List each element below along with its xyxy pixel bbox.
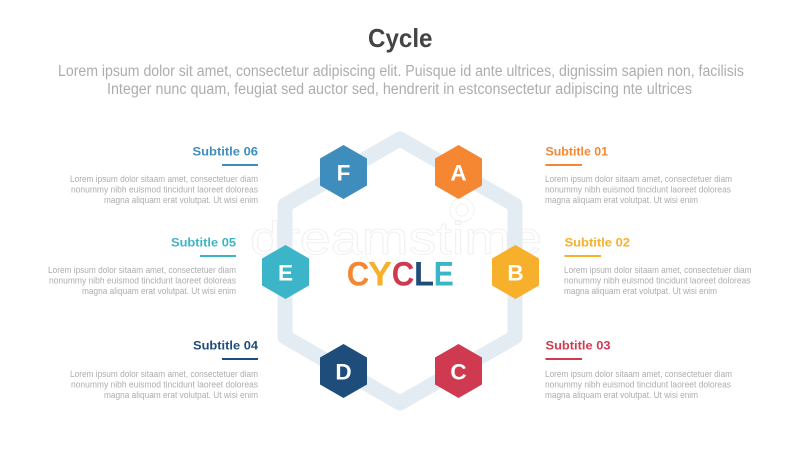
block: subtitle 01: magna aliquam erat volutpat. Ut wisi enim xyxy=(545,195,698,205)
hexagon F xyxy=(320,145,367,199)
hexagon ring xyxy=(285,139,515,403)
block: subtitle 05: Lorem ipsum dolor sitaam amet, consectetuer diam xyxy=(48,265,236,275)
block: subtitle 04: magna aliquam erat volutpat. Ut wisi enim xyxy=(104,390,258,400)
block: subtitle 01 xyxy=(545,144,732,205)
hexagon E: E xyxy=(278,260,293,286)
block: subtitle 03 xyxy=(545,338,732,400)
block: subtitle 01: Lorem ipsum dolor sitaam amet, consectetuer diam xyxy=(545,174,732,184)
center word CYCLE: Y xyxy=(368,256,392,294)
block: subtitle 04: Lorem ipsum dolor sitaam amet, consectetuer diam xyxy=(70,369,258,379)
block: subtitle 02 xyxy=(564,236,752,296)
hexagon E xyxy=(262,245,309,299)
hexagon B xyxy=(492,245,539,299)
block: subtitle 05: magna aliquam erat volutpat. Ut wisi enim xyxy=(82,286,236,296)
description text: Lorem ipsum dolor sit amet, consectetur adipiscing elit. Puisque id ante ultrices, dignissim sapien non, facilisis xyxy=(58,63,744,80)
watermark: dreamstime xyxy=(250,212,542,264)
hexagon C: C xyxy=(450,360,467,384)
watermark xyxy=(250,198,542,264)
block: subtitle 06: nonummy nibh euismod tincidunt laoreet doloreas xyxy=(71,184,258,194)
title: Cycle xyxy=(368,23,432,53)
hexagon A xyxy=(435,145,482,199)
hexagon D xyxy=(320,344,367,398)
block: subtitle 06: Subtitle 06 xyxy=(192,144,258,158)
block: subtitle 04: Subtitle 04 xyxy=(193,338,258,352)
description text: Integer nunc quam, feugiat sed auctor sed, hendrerit in estconsectetur adipiscing nte ultrices xyxy=(107,81,692,98)
block: subtitle 01: Subtitle 01 xyxy=(546,144,608,158)
block: subtitle 02: nonummy nibh euismod tincidunt laoreet doloreas xyxy=(564,276,751,286)
block: subtitle 06: magna aliquam erat volutpat. Ut wisi enim xyxy=(104,195,258,205)
center word CYCLE: C xyxy=(347,256,369,294)
block: subtitle 06: Lorem ipsum dolor sitaam amet, consectetuer diam xyxy=(70,174,258,184)
hexagon A: A xyxy=(450,160,467,186)
hexagon B: B xyxy=(507,260,524,286)
block: subtitle 04: nonummy nibh euismod tincidunt laoreet doloreas xyxy=(71,380,258,390)
block: subtitle 04 xyxy=(70,338,258,400)
block: subtitle 05 xyxy=(48,236,236,296)
block: subtitle 02: magna aliquam erat volutpat. Ut wisi enim xyxy=(564,286,717,296)
hexagon D: D xyxy=(335,360,352,384)
description text xyxy=(58,63,744,98)
block: subtitle 05: nonummy nibh euismod tincidunt laoreet doloreas xyxy=(49,276,236,286)
block: subtitle 02: Lorem ipsum dolor sitaam amet, consectetuer diam xyxy=(564,265,752,275)
block: subtitle 02: Subtitle 02 xyxy=(564,236,630,250)
center word CYCLE xyxy=(347,256,454,294)
center word CYCLE: E xyxy=(434,256,454,294)
hexagon C xyxy=(435,344,482,398)
block: subtitle 06 xyxy=(70,144,258,205)
center word CYCLE: C xyxy=(392,256,414,294)
block: subtitle 01: nonummy nibh euismod tincidunt laoreet doloreas xyxy=(545,184,731,194)
block: subtitle 03: Subtitle 03 xyxy=(546,338,611,352)
block: subtitle 03: magna aliquam erat volutpat. Ut wisi enim xyxy=(545,390,698,400)
block: subtitle 05: Subtitle 05 xyxy=(171,236,236,250)
hexagon F: F xyxy=(337,160,350,186)
block: subtitle 03: nonummy nibh euismod tincidunt laoreet doloreas xyxy=(545,380,731,390)
block: subtitle 03: Lorem ipsum dolor sitaam amet, consectetuer diam xyxy=(545,369,732,379)
center word CYCLE: L xyxy=(414,256,434,294)
